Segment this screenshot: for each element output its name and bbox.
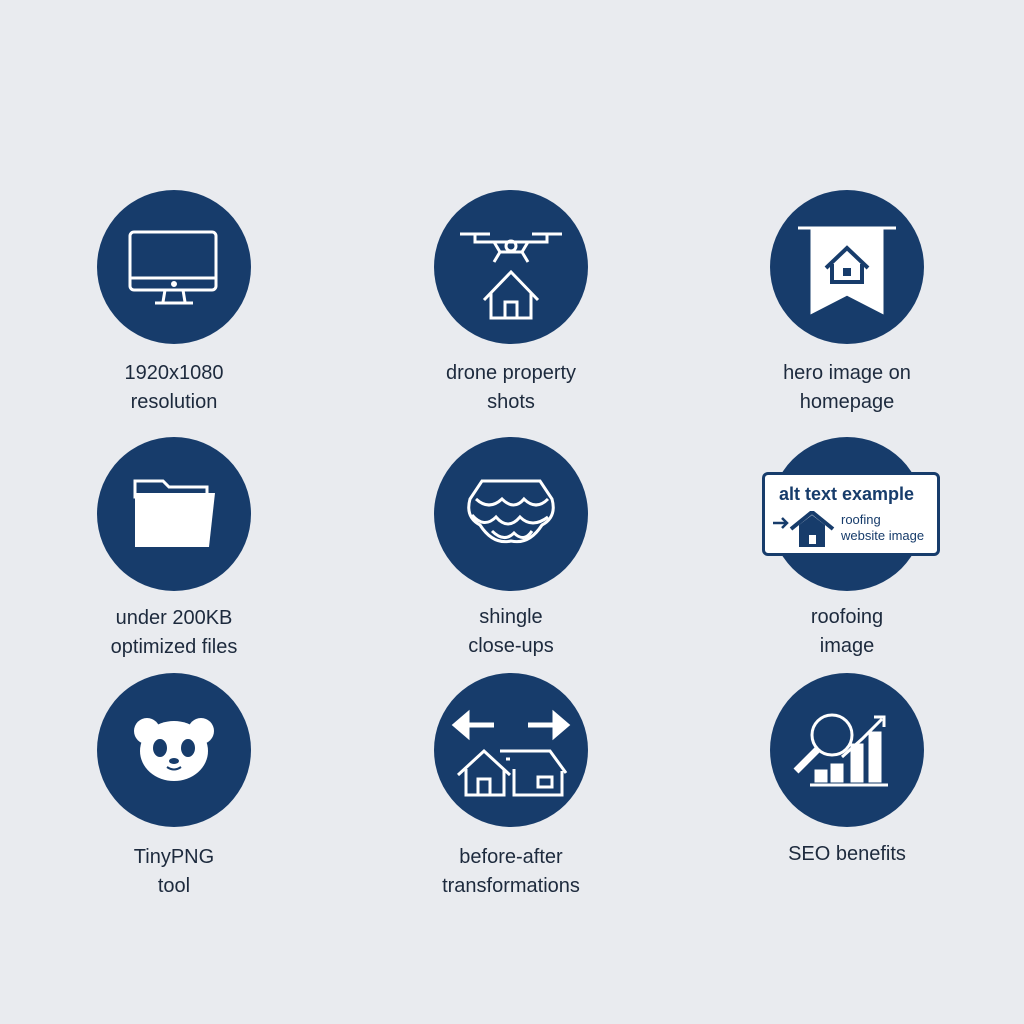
callout: alt text box: website image — [841, 528, 924, 543]
callout: alt text box — [762, 472, 940, 556]
label: files: under 200KB — [116, 607, 232, 629]
label: hero: homepage — [800, 391, 894, 413]
label: before-after: transformations — [442, 875, 580, 897]
label: resolution: resolution — [131, 391, 217, 413]
callout: alt text box: roofing — [841, 512, 881, 527]
icon: banner house — [770, 190, 924, 344]
label: shingle — [468, 606, 554, 657]
label: roofoing: image — [820, 635, 874, 657]
icon: SEO magnifier chart — [770, 673, 924, 827]
label: roofoing: roofoing — [811, 606, 883, 628]
label: before-after: before-after — [459, 846, 563, 868]
label: resolution: 1920x1080 — [124, 362, 223, 384]
icon: drone and house — [434, 190, 588, 344]
callout: alt text box: alt text example — [779, 484, 914, 504]
label: tinypng: TinyPNG — [134, 846, 214, 868]
label: shingle: close-ups — [468, 635, 554, 657]
label: tinypng: tool — [158, 875, 190, 897]
label: drone: drone property — [446, 362, 576, 384]
label: SEO: SEO benefits — [788, 843, 906, 865]
icon: shingles — [434, 437, 588, 591]
label: drone: shots — [487, 391, 535, 413]
label: roofoing — [811, 606, 883, 657]
icon: alt text example — [770, 437, 924, 591]
label: files — [111, 607, 237, 658]
label: shingle: shingle — [479, 606, 543, 628]
icon: panda — [97, 673, 251, 827]
label: drone — [446, 362, 576, 413]
label: before-after — [442, 846, 580, 897]
label: tinypng — [134, 846, 214, 897]
label: hero: hero image on — [783, 362, 911, 384]
icon: before after houses — [434, 673, 588, 827]
label: hero — [783, 362, 911, 413]
label: files: optimized files — [111, 636, 237, 658]
icon: folder — [97, 437, 251, 591]
icon: monitor — [97, 190, 251, 344]
label: resolution — [124, 362, 223, 413]
